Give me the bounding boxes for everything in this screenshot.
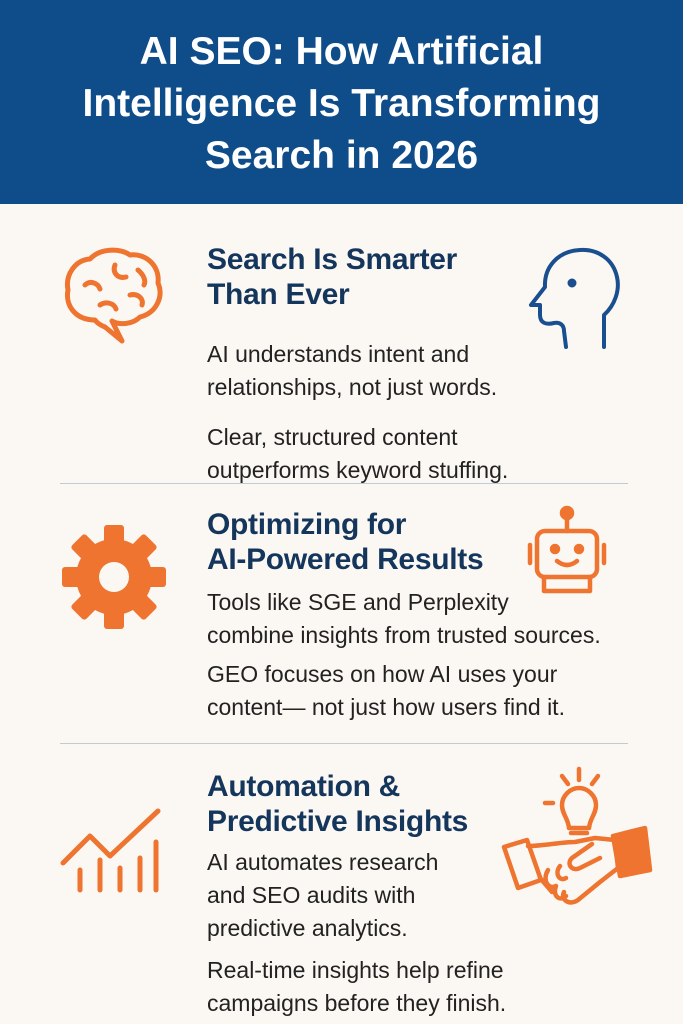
section 1 heading: Search Is Smarter [207,243,457,276]
section 1 body: relationships, not just words. [207,374,497,400]
section 1 body: AI understands intent and [207,341,469,367]
section 3 body: Real-time insights help refine [207,957,504,983]
section 2 body: combine insights from trusted sources. [207,622,601,648]
section 3 body [207,849,506,1016]
header banner [0,0,683,204]
section 3 body: predictive analytics. [207,915,408,941]
divider [60,483,628,484]
icon: handshake with bulb [502,766,652,905]
icon: robot [528,506,606,594]
section 2 body: content— not just how users find it. [207,694,565,720]
icon: head profile [528,248,620,349]
section 1 heading [207,243,457,311]
section 1 body: Clear, structured content [207,424,458,450]
icon: chart [60,808,160,892]
title: Intelligence Is Transforming [83,82,600,125]
section 2 heading: AI-Powered Results [207,543,483,576]
section 3 body: and SEO audits with [207,882,415,908]
bulb [545,769,598,833]
section 2 body [207,589,601,720]
section 1 heading: Than Ever [207,278,349,311]
icon: brain [64,248,163,344]
section 3 heading: Predictive Insights [207,805,468,838]
section 2 body: GEO focuses on how AI uses your [207,661,557,687]
section 3 body: AI automates research [207,849,438,875]
section 2 heading [207,508,483,576]
section 3 body: campaigns before they finish. [207,990,506,1016]
title [83,30,600,177]
icon: gear [62,525,166,629]
section 3 heading: Automation & [207,770,400,803]
section 1 body [207,341,508,483]
title: Search in 2026 [205,134,478,177]
title: AI SEO: How Artificial [140,30,543,73]
section 1 body: outperforms keyword stuffing. [207,457,508,483]
section 2 body: Tools like SGE and Perplexity [207,589,509,615]
divider [60,743,628,744]
hands [504,828,650,902]
section 2 heading: Optimizing for [207,508,406,541]
section 3 heading [207,770,468,838]
